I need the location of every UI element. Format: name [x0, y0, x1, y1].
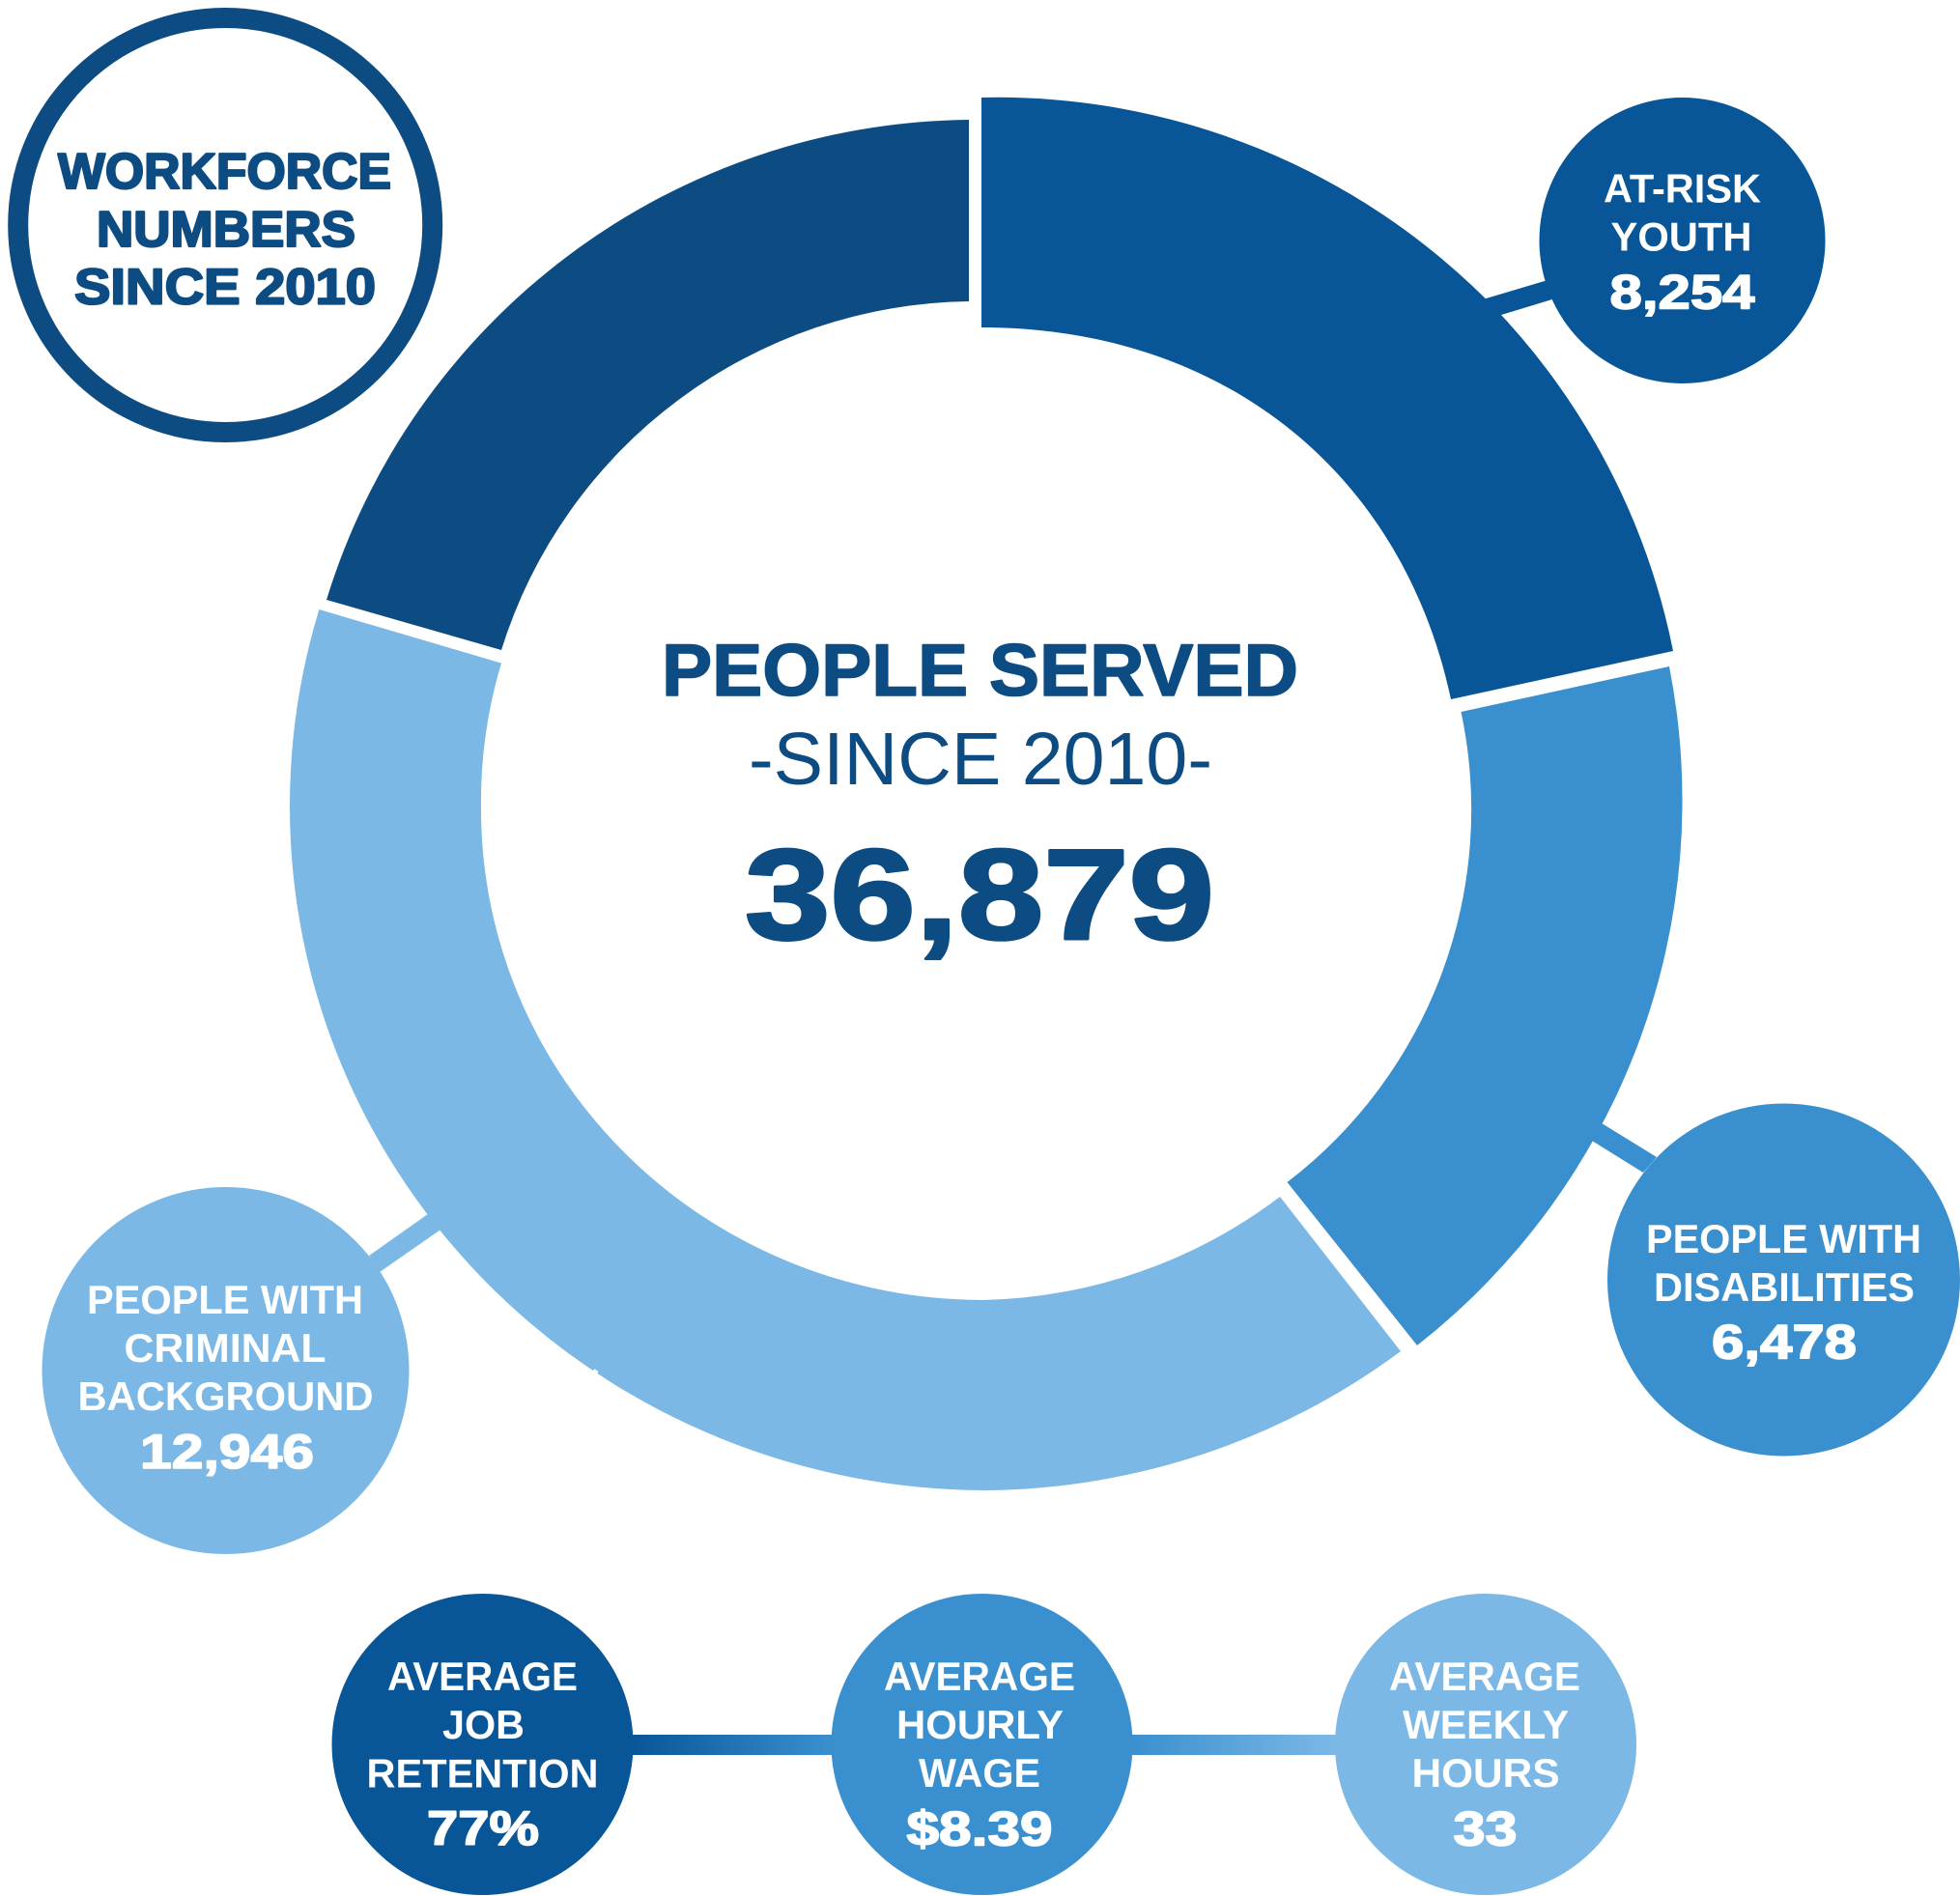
callout: at-risk youth — [1540, 98, 1826, 383]
segment: people with criminal background — [290, 609, 1401, 1490]
stat circle: average hourly wage: WAGE — [919, 1750, 1040, 1796]
callout: people with criminal background: CRIMINAL — [124, 1325, 327, 1371]
connector bar: retention to wage — [628, 1735, 836, 1755]
stat circle: average weekly hours: AVERAGE — [1389, 1654, 1580, 1699]
connector: criminal background — [369, 1209, 446, 1272]
stat circle: average job retention — [332, 1594, 634, 1895]
center text: people served total: PEOPLE SERVED — [662, 630, 1298, 712]
stat circle: average job retention: AVERAGE — [387, 1654, 578, 1699]
callout: people with disabilities: 6,478 — [1712, 1316, 1857, 1370]
callout: people with criminal background: PEOPLE WITH — [87, 1277, 363, 1322]
stat circle: average hourly wage — [831, 1594, 1132, 1895]
stat circle: average hourly wage: HOURLY — [896, 1702, 1064, 1747]
badge: workforce numbers since 2010: WORKFORCE — [58, 143, 391, 199]
connector: disabilities — [1584, 1118, 1657, 1173]
stat circle: average weekly hours: HOURS — [1412, 1750, 1559, 1796]
callout: people with disabilities — [1607, 1103, 1960, 1457]
badge: workforce numbers since 2010: NUMBERS — [97, 201, 355, 257]
callout: at-risk youth: AT-RISK — [1604, 166, 1761, 211]
donut chart: people served by group — [290, 98, 1683, 1490]
stat circle: average hourly wage: AVERAGE — [884, 1654, 1075, 1699]
stat circle: average weekly hours: WEEKLY — [1403, 1702, 1569, 1747]
center text: people served total: 36,879 — [745, 824, 1214, 967]
segment: people with disabilities — [1287, 666, 1683, 1345]
connector bar: wage to hours — [1128, 1735, 1339, 1755]
stat circle: average hourly wage: $8.39 — [906, 1802, 1053, 1856]
badge: workforce numbers since 2010: SINCE 2010 — [74, 259, 376, 315]
callout: at-risk youth: YOUTH — [1611, 214, 1752, 259]
stat circle: average job retention: 77% — [427, 1801, 539, 1855]
callout: people with criminal background: 12,946 — [140, 1425, 314, 1479]
segment: unlabelled dark navy — [327, 120, 969, 650]
badge: workforce numbers since 2010 — [18, 17, 433, 433]
callout: at-risk youth: 8,254 — [1609, 265, 1755, 319]
connector: at-risk youth — [1478, 281, 1552, 317]
center text: people served total: -SINCE 2010- — [749, 718, 1212, 801]
callout: people with disabilities: PEOPLE WITH — [1646, 1216, 1921, 1261]
segment: at-risk youth — [981, 98, 1673, 699]
callout: people with criminal background: BACKGROUND — [77, 1373, 373, 1419]
stat circle: average job retention: JOB — [442, 1702, 525, 1747]
callout: people with disabilities: DISABILITIES — [1654, 1264, 1915, 1310]
stat circle: average weekly hours — [1335, 1594, 1636, 1895]
stat circle: average job retention: RETENTION — [367, 1750, 599, 1797]
callout: people with criminal background — [43, 1187, 410, 1554]
center text: people served total — [662, 630, 1298, 967]
stat circle: average weekly hours: 33 — [1453, 1802, 1517, 1856]
